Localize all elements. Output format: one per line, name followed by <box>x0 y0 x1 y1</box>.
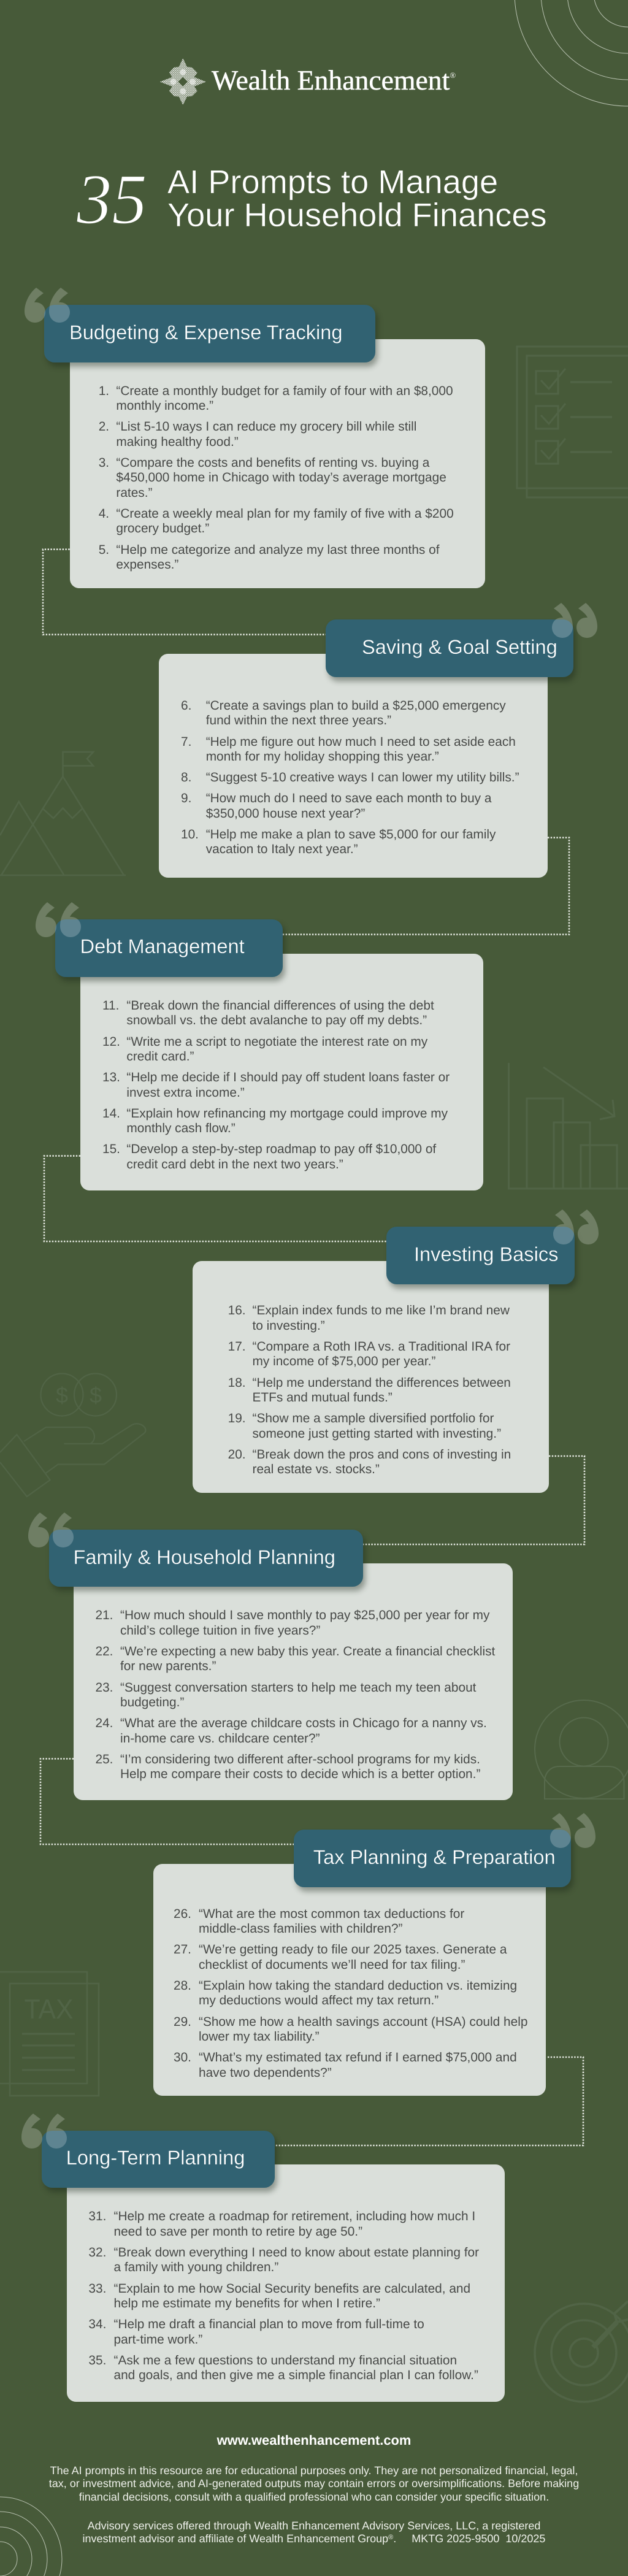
prompts 6-10: fund within the next three years.” <box>206 713 391 727</box>
icon: target with arrow <box>535 2301 628 2402</box>
heading: long-term planning <box>42 2131 275 2188</box>
connector: family to tax <box>40 1759 294 1844</box>
heading: saving and goal setting: Saving & Goal Setting <box>362 635 557 658</box>
panel: tax planning and preparation: 28. <box>174 1979 191 1993</box>
panel: budgeting and expense tracking: 5. <box>99 543 109 557</box>
prompts 26-30: “What’s my estimated tax refund if I earned $75,000 and <box>199 2050 517 2064</box>
prompts 31-35: “Explain to me how Social Security benefits are calculated, and <box>114 2282 470 2296</box>
panel: long-term planning <box>67 2164 505 2402</box>
prompts 26-30: my deductions would affect my tax return.” <box>199 1993 438 2007</box>
panel: budgeting and expense tracking: 3. <box>99 456 109 470</box>
panel: family and household planning: 25. <box>96 1752 113 1766</box>
heading: long-term planning: Long-Term Planning <box>66 2146 245 2169</box>
prompts 11-15: monthly cash flow.” <box>126 1121 236 1135</box>
panel: family and household planning: 21. <box>96 1608 113 1622</box>
panel: family and household planning: 23. <box>96 1681 113 1695</box>
prompts 26-30: “We’re getting ready to file our 2025 taxes. Generate a <box>199 1942 507 1957</box>
prompts 1-5: “Create a monthly budget for a family of four with an $8,000 <box>116 384 453 398</box>
prompts 1-5: monthly income.” <box>116 399 213 413</box>
logo: star mark <box>160 59 206 104</box>
heading: family and household planning: Family & Household Planning <box>73 1546 335 1568</box>
panel: debt management <box>80 954 483 1190</box>
title <box>167 164 547 234</box>
panel: long-term planning: 34. <box>88 2317 106 2331</box>
panel: tax planning and preparation: 26. <box>174 1907 191 1921</box>
connector: budgeting to saving <box>43 550 326 635</box>
prompts 11-15 <box>102 999 450 1171</box>
prompts 16-20: “Help me understand the differences between <box>253 1376 511 1390</box>
panel: investing basics: 18. <box>228 1376 246 1390</box>
prompts 16-20: real estate vs. stocks.” <box>253 1462 380 1476</box>
prompts 6-10: “Help me make a plan to save $5,000 for our family <box>206 827 496 841</box>
heading: saving and goal setting <box>326 619 573 677</box>
prompts 21-25 <box>96 1608 496 1781</box>
title: Your Household Finances <box>167 197 547 234</box>
footer: advisory statement <box>83 2520 545 2545</box>
icon: closing quote 2 <box>552 603 597 638</box>
heading: debt management <box>55 919 282 976</box>
prompts 16-20: “Explain index funds to me like I’m brand new <box>253 1303 510 1317</box>
arcs: bottom left <box>0 2497 62 2576</box>
icon: tax documents: TAX <box>25 1993 74 2025</box>
panel: tax planning and preparation: 27. <box>174 1942 191 1957</box>
prompts 21-25: “I’m considering two different after-school programs for my kids. <box>120 1752 480 1766</box>
prompts 21-25: in-home care vs. childcare center?” <box>120 1731 320 1746</box>
connector: saving to debt <box>282 838 569 935</box>
prompts 1-5: “Help me categorize and analyze my last three months of <box>116 543 440 557</box>
prompts 16-20: my income of $75,000 per year.” <box>253 1354 435 1368</box>
prompts 11-15: “Break down the financial differences of using the debt <box>126 999 434 1013</box>
title: AI Prompts to Manage <box>167 164 498 201</box>
icon: falling bar chart <box>509 1063 628 1189</box>
prompts 31-35: a family with young children.” <box>114 2260 278 2274</box>
panel: long-term planning: 33. <box>88 2282 106 2296</box>
icon: coins in hand: $ <box>56 1382 68 1408</box>
prompts 16-20: ETFs and mutual funds.” <box>253 1390 392 1405</box>
prompts 31-35: “Help me draft a financial plan to move from full-time to <box>114 2317 424 2331</box>
prompts 26-30 <box>174 1907 527 2080</box>
prompts 16-20 <box>228 1303 511 1476</box>
icon: opening quote 7 <box>21 2114 67 2149</box>
panel: saving and goal setting: 8. <box>181 770 191 784</box>
prompts 1-5: making healthy food.” <box>116 435 239 449</box>
prompts 11-15: “Help me decide if I should pay off student loans faster or <box>126 1070 450 1084</box>
icon: opening quote 5 <box>28 1512 74 1547</box>
panel: saving and goal setting: 6. <box>181 699 191 713</box>
prompts 21-25: for new parents.” <box>120 1659 216 1673</box>
icon: person in circle <box>535 1700 628 1799</box>
prompts 6-10: “Create a savings plan to build a $25,000 emergency <box>206 699 506 713</box>
icon: closing quote 6 <box>550 1813 595 1848</box>
heading: debt management: Debt Management <box>80 935 245 957</box>
prompts 21-25: “How much should I save monthly to pay $25,000 per year for my <box>120 1608 489 1622</box>
prompts 31-35: “Break down everything I need to know about estate planning for <box>114 2245 479 2260</box>
prompts 6-10: $350,000 house next year?” <box>206 807 365 821</box>
panel: long-term planning: 31. <box>88 2209 106 2223</box>
prompts 31-35: part-time work.” <box>114 2333 202 2347</box>
panel: budgeting and expense tracking: 1. <box>99 384 109 398</box>
panel: investing basics: 19. <box>228 1411 246 1425</box>
panel: debt management: 11. <box>102 999 119 1013</box>
panel: debt management: 13. <box>102 1070 120 1084</box>
heading: budgeting and expense tracking <box>44 305 375 362</box>
heading: family and household planning <box>49 1530 363 1587</box>
panel: investing basics <box>193 1261 549 1493</box>
icon: closing quote 4 <box>553 1209 599 1244</box>
prompts 1-5: rates.” <box>116 486 152 500</box>
panel: tax planning and preparation: 29. <box>174 2015 191 2029</box>
connector: tax to long-term <box>275 2057 583 2145</box>
panel: family and household planning: 22. <box>96 1644 113 1658</box>
panel: budgeting and expense tracking: 2. <box>99 420 109 434</box>
prompts 21-25: budgeting.” <box>120 1695 184 1709</box>
panel: budgeting and expense tracking <box>70 339 485 588</box>
connector: debt to investing <box>44 1156 386 1241</box>
prompts 11-15: “Explain how refinancing my mortgage could improve my <box>126 1106 448 1121</box>
heading: investing basics: Investing Basics <box>414 1243 558 1265</box>
panel: tax planning and preparation: 30. <box>174 2050 191 2064</box>
footer: disclaimer: The AI prompts in this resource are for educational purposes only. They are not personalized financial, legal, <box>50 2464 578 2477</box>
prompts 1-5: $450,000 home in Chicago with today’s average mortgage <box>116 470 446 485</box>
panel: saving and goal setting: 9. <box>181 791 191 805</box>
title number: 35 <box>77 159 147 239</box>
heading: tax planning and preparation: Tax Planning & Preparation <box>313 1846 556 1868</box>
prompts 26-30: “What are the most common tax deductions for <box>199 1907 464 1921</box>
prompts 1-5: “List 5-10 ways I can reduce my grocery bill while still <box>116 420 416 434</box>
prompts 6-10: “Help me figure out how much I need to set aside each <box>206 735 516 749</box>
logo: wordmark: Wealth Enhancement® <box>212 64 456 96</box>
panel: debt management: 15. <box>102 1142 120 1156</box>
panel: family and household planning <box>74 1563 513 1800</box>
icon: coins in hand: $ <box>90 1382 102 1408</box>
prompts 31-35 <box>88 2209 479 2382</box>
prompts 21-25: child’s college tuition in five years?” <box>120 1623 320 1638</box>
prompts 16-20: to investing.” <box>253 1319 325 1333</box>
panel: saving and goal setting <box>159 654 548 878</box>
prompts 1-5 <box>99 384 454 572</box>
heading: investing basics <box>386 1227 575 1284</box>
prompts 1-5: “Create a weekly meal plan for my family of five with a $200 <box>116 507 454 521</box>
prompts 31-35: “Ask me a few questions to understand my financial situation <box>114 2353 457 2367</box>
prompts 16-20: “Show me a sample diversified portfolio for <box>253 1411 494 1425</box>
prompts 11-15: “Write me a script to negotiate the interest rate on my <box>126 1035 427 1049</box>
panel: budgeting and expense tracking: 4. <box>99 507 109 521</box>
prompts 21-25: “What are the average childcare costs in Chicago for a nanny vs. <box>120 1716 487 1730</box>
prompts 6-10: “How much do I need to save each month to buy a <box>206 791 491 805</box>
prompts 1-5: “Compare the costs and benefits of renting vs. buying a <box>116 456 429 470</box>
prompts 11-15: “Develop a step-by-step roadmap to pay off $10,000 of <box>126 1142 436 1156</box>
heading: budgeting and expense tracking: Budgeting & Expense Tracking <box>69 321 343 343</box>
prompts 31-35: need to save per month to retire by age 50.” <box>114 2225 362 2239</box>
footer: website: www.wealthenhancement.com <box>217 2432 411 2448</box>
icon: opening quote 3 <box>36 902 81 937</box>
prompts 6-10: vacation to Italy next year.” <box>206 842 358 856</box>
footer: disclaimer <box>49 2464 579 2503</box>
footer: advisory statement: investment advisor and affiliate of Wealth Enhancement Group®. MKTG 2025-9500 10/2025 <box>83 2532 545 2545</box>
icon: mountain with flag <box>0 752 126 875</box>
panel: saving and goal setting: 10. <box>181 827 199 841</box>
icon: tax documents <box>0 1972 99 2096</box>
prompts 11-15: snowball vs. the debt avalanche to pay off my debts.” <box>126 1013 427 1027</box>
prompts 31-35: and goals, and then give me a simple financial plan I can follow.” <box>114 2368 478 2382</box>
arcs: top right <box>515 0 628 106</box>
prompts 11-15: invest extra income.” <box>126 1086 245 1100</box>
panel: investing basics: 17. <box>228 1340 246 1354</box>
panel: long-term planning: 32. <box>88 2245 106 2260</box>
panel: saving and goal setting: 7. <box>181 735 191 749</box>
icon: checklist <box>517 347 628 497</box>
prompts 21-25: “Suggest conversation starters to help me teach my teen about <box>120 1681 476 1695</box>
prompts 26-30: middle-class families with children?” <box>199 1922 402 1936</box>
panel: debt management: 12. <box>102 1035 120 1049</box>
prompts 16-20: “Break down the pros and cons of investing in <box>253 1447 511 1462</box>
prompts 26-30: have two dependents?” <box>199 2066 332 2080</box>
prompts 16-20: someone just getting started with investing.” <box>253 1427 501 1441</box>
icon: coins in hand <box>0 1374 145 1497</box>
prompts 6-10: “Suggest 5-10 creative ways I can lower my utility bills.” <box>206 770 519 784</box>
footer: disclaimer: financial decisions, consult with a qualified professional who can consider your specific situation. <box>79 2491 549 2503</box>
prompts 26-30: “Show me how a health savings account (HSA) could help <box>199 2015 527 2029</box>
footer: disclaimer: tax, or investment advice, and AI-generated outputs may contain errors or oversimplifications. Before making <box>49 2477 579 2490</box>
heading: tax planning and preparation <box>294 1830 571 1887</box>
prompts 26-30: checklist of documents we’ll need for tax filing.” <box>199 1958 465 1972</box>
panel: investing basics: 20. <box>228 1447 246 1462</box>
prompts 21-25: Help me compare their costs to decide which is a better option.” <box>120 1767 480 1781</box>
prompts 11-15: credit card debt in the next two years.” <box>126 1157 343 1171</box>
panel: long-term planning: 35. <box>88 2353 106 2367</box>
panel: tax planning and preparation <box>153 1864 546 2096</box>
prompts 26-30: “Explain how taking the standard deduction vs. itemizing <box>199 1979 517 1993</box>
panel: family and household planning: 24. <box>96 1716 113 1730</box>
prompts 31-35: help me estimate my benefits for when I retire.” <box>114 2296 380 2310</box>
footer: advisory statement: Advisory services offered through Wealth Enhancement Advisory Services, LLC, a registered <box>88 2520 540 2532</box>
prompts 16-20: “Compare a Roth IRA vs. a Traditional IRA for <box>253 1340 510 1354</box>
connector: investing to family <box>363 1456 584 1544</box>
prompts 1-5: expenses.” <box>116 558 178 572</box>
prompts 11-15: credit card.” <box>126 1049 194 1064</box>
panel: debt management: 14. <box>102 1106 120 1121</box>
prompts 21-25: “We’re expecting a new baby this year. Create a financial checklist <box>120 1644 495 1658</box>
prompts 1-5: grocery budget.” <box>116 521 209 535</box>
icon: opening quote 1 <box>25 288 70 323</box>
prompts 6-10 <box>181 699 519 856</box>
prompts 26-30: lower my tax liability.” <box>199 2030 320 2044</box>
panel: investing basics: 16. <box>228 1303 246 1317</box>
prompts 6-10: month for my holiday shopping this year.” <box>206 749 439 764</box>
prompts 31-35: “Help me create a roadmap for retirement, including how much I <box>114 2209 475 2223</box>
